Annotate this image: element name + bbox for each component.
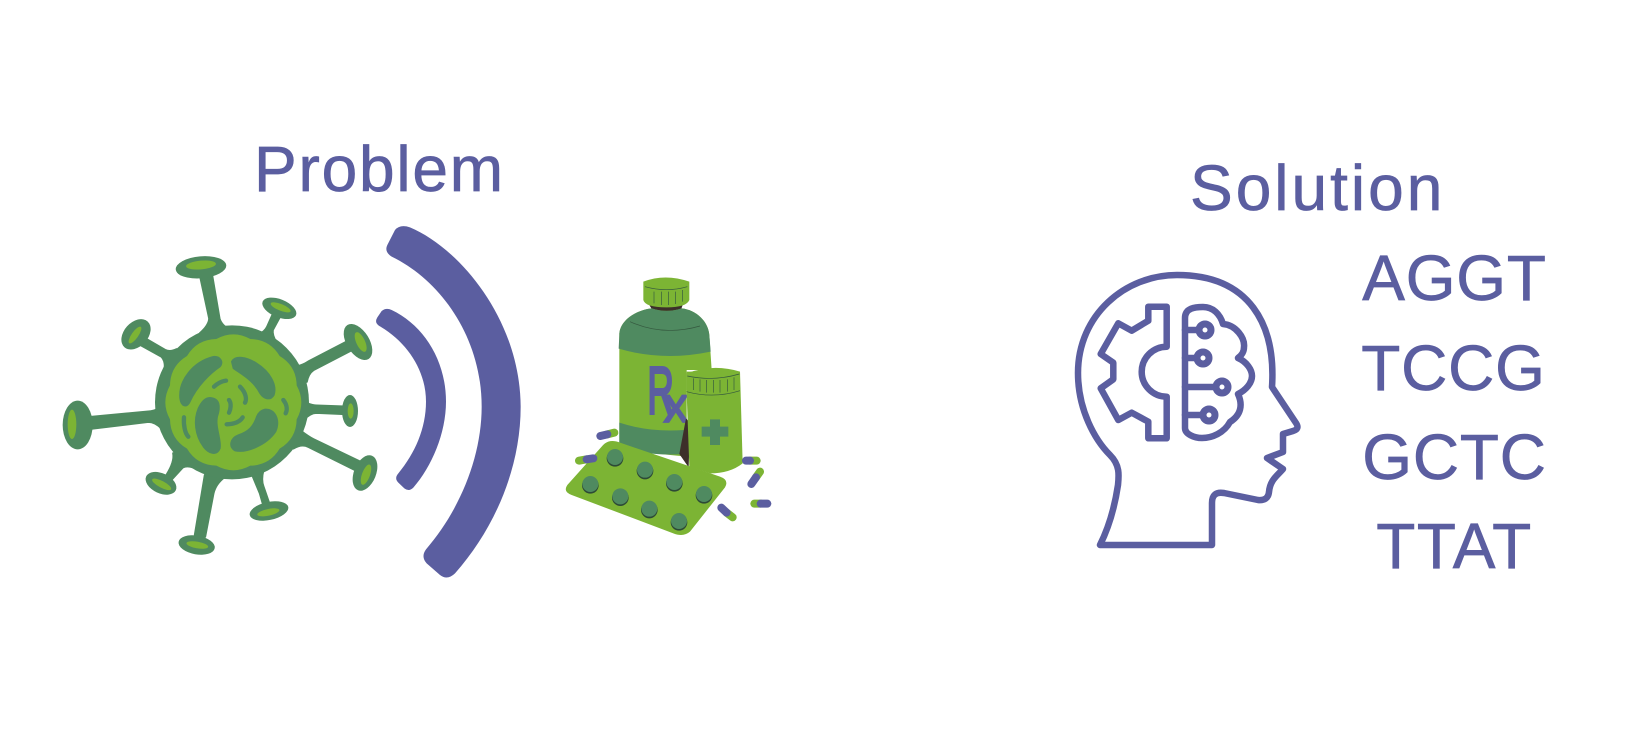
pills (582, 449, 712, 529)
capsules (579, 433, 767, 517)
icon: virus (63, 254, 382, 557)
gear half (1101, 307, 1167, 438)
virus spike tips (68, 259, 373, 550)
bottle cap (643, 277, 689, 307)
sequence line 2: TCCG (1361, 332, 1546, 404)
outer arc (386, 226, 521, 577)
inner arc (376, 309, 446, 490)
head outline (1078, 275, 1297, 545)
bottle lower band (619, 423, 684, 455)
Rx label: x (663, 377, 688, 433)
lid ridges (687, 374, 740, 395)
DNA sequence text (1361, 242, 1547, 582)
sequence line 4: TTAT (1376, 510, 1533, 582)
virus body inner (165, 334, 301, 470)
heading: Problem: Problem (254, 133, 505, 205)
pill shadows (582, 450, 712, 531)
bottle upper band (619, 308, 711, 356)
virus small dashes (184, 381, 287, 437)
Rx label (647, 354, 688, 433)
virus spikes (88, 273, 360, 537)
virus body outer (155, 325, 309, 479)
small bottle shadow (679, 418, 690, 467)
cap ridges (630, 287, 700, 330)
virus genome blobs (180, 357, 278, 453)
blister pack (566, 441, 726, 535)
small bottle (687, 372, 743, 473)
signal arcs (376, 226, 521, 577)
medical cross (702, 419, 728, 445)
large bottle body (619, 308, 712, 457)
bottle neck (649, 305, 683, 313)
circuit lines and nodes (1185, 324, 1228, 421)
brain half (1185, 307, 1252, 438)
sequence line 1: AGGT (1362, 242, 1547, 314)
icon: head with gear and brain (1078, 275, 1297, 545)
virus spike caps (63, 254, 382, 557)
Rx label: R (647, 354, 674, 428)
sequence line 3: GCTC (1362, 421, 1547, 493)
small bottle lid (687, 368, 740, 394)
heading: Solution: Solution (1190, 152, 1445, 224)
icon: medicine bottles and pills (566, 277, 767, 535)
